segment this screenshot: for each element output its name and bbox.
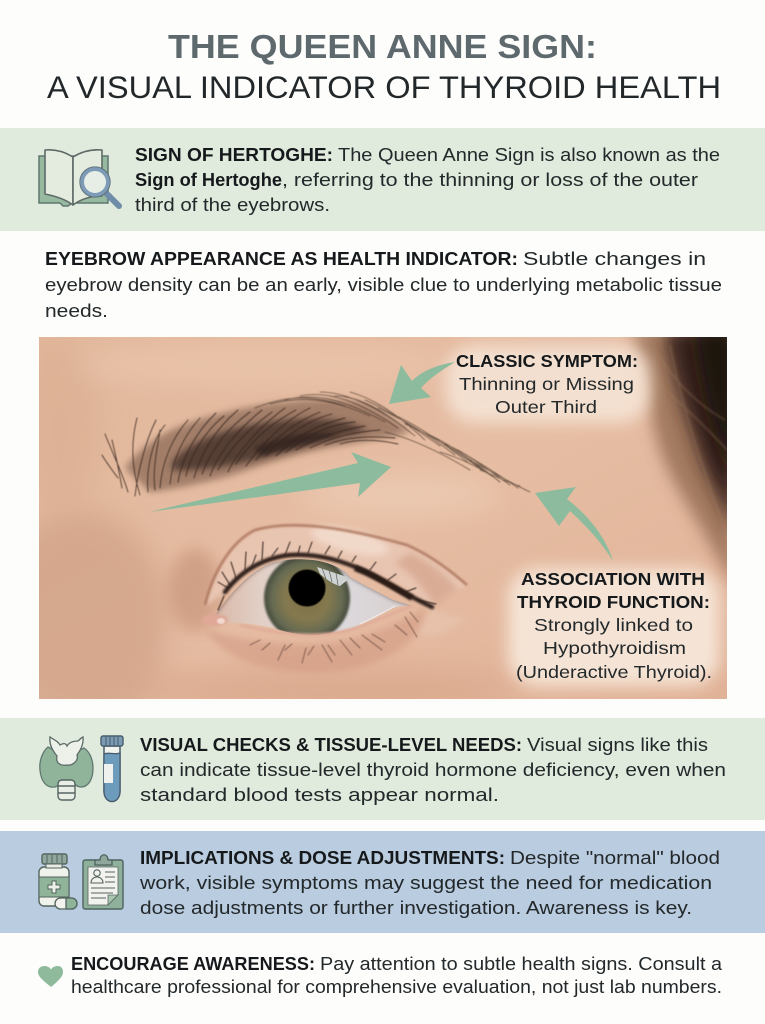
text block: encourage awareness: healthcare professional for comprehensive evaluation, not just lab numbers. <box>71 976 722 997</box>
text: sign of Hertoghe: Sign of Hertoghe <box>135 169 282 190</box>
text: implications <box>139 847 720 918</box>
text: implications: IMPLICATIONS & DOSE ADJUSTMENTS: <box>140 847 505 868</box>
callout: association with thyroid function: Hypothyroidism <box>543 638 686 658</box>
text block: eyebrow appearance as health indicator <box>45 248 722 321</box>
icon: medicine bottle with pill <box>39 854 77 909</box>
panel: implications and dose adjustments <box>0 831 765 933</box>
callout: association with thyroid function <box>516 569 712 682</box>
callout: association with thyroid function: ASSOCIATION WITH <box>521 569 705 589</box>
text block: eyebrow appearance as health indicator: Subtle changes in <box>523 248 706 269</box>
callout: association with thyroid function: Strongly linked to <box>534 615 693 635</box>
text: sign of Hertoghe: The Queen Anne Sign is also known as the <box>338 144 720 165</box>
text: visual checks: standard blood tests appear normal. <box>140 784 499 805</box>
text: visual checks: VISUAL CHECKS & TISSUE-LEVEL NEEDS: <box>140 734 522 755</box>
text block: eyebrow appearance as health indicator: needs. <box>45 300 108 321</box>
title: A VISUAL INDICATOR OF THYROID HEALTH <box>47 69 721 105</box>
callout: association with thyroid function: THYROID FUNCTION: <box>517 592 710 612</box>
title: THE QUEEN ANNE SIGN: <box>168 28 597 65</box>
callout: classic symptom: Thinning or Missing <box>459 374 634 394</box>
icon: test tube <box>101 736 123 802</box>
upper lash line <box>225 555 432 607</box>
text: sign of Hertoghe: SIGN OF HERTOGHE: <box>135 144 333 165</box>
text: sign of Hertoghe <box>135 144 720 215</box>
text: sign of Hertoghe: third of the eyebrows. <box>135 194 330 215</box>
text block: encourage awareness: Pay attention to subtle health signs. Consult a <box>320 953 723 974</box>
callout: association with thyroid function: (Underactive Thyroid). <box>516 662 712 682</box>
inner corner <box>202 614 228 626</box>
text block: encourage awareness <box>71 953 723 997</box>
panel: eye photograph <box>39 337 727 699</box>
label glow <box>445 345 650 423</box>
panel: sign of Hertoghe <box>0 128 765 231</box>
text: visual checks: can indicate tissue-level thyroid hormone deficiency, even when <box>140 759 726 780</box>
icon: heart <box>38 966 63 987</box>
eye socket shading and crease <box>169 521 470 673</box>
text: visual checks: Visual signs like this <box>527 734 708 755</box>
lower lid and lashes <box>240 606 412 635</box>
text: visual checks <box>140 734 726 805</box>
icon: thyroid gland <box>40 737 93 800</box>
eye <box>202 542 436 663</box>
title <box>47 28 721 105</box>
arrow: large pointing along brow <box>149 452 391 512</box>
text: implications: Despite "normal" blood <box>510 847 720 868</box>
text block: eyebrow appearance as health indicator: EYEBROW APPEARANCE AS HEALTH INDICATOR: <box>45 248 518 269</box>
text: implications: dose adjustments or further investigation. Awareness is key. <box>140 897 692 918</box>
icon: clipboard <box>83 855 123 909</box>
arrow: lower pointing to brow tail <box>535 487 613 561</box>
text block: eyebrow appearance as health indicator: eyebrow density can be an early, visible clue to underlying metabolic tissue <box>45 274 722 295</box>
callout: classic symptom: Outer Third <box>495 397 597 417</box>
callout: classic symptom <box>456 355 636 413</box>
callout: classic symptom: CLASSIC SYMPTOM: <box>456 351 638 371</box>
panel: visual checks and tissue-level needs <box>0 718 765 820</box>
eyebrow <box>102 392 530 496</box>
arrow: top pointing to brow arch <box>389 362 455 404</box>
hair <box>632 330 735 590</box>
text: sign of Hertoghe: , referring to the thinning or loss of the outer <box>282 169 698 190</box>
text: implications: work, visible symptoms may suggest the need for medication <box>139 872 712 893</box>
icon: book with magnifying glass <box>39 150 119 206</box>
text block: encourage awareness: ENCOURAGE AWARENESS: <box>71 953 315 974</box>
